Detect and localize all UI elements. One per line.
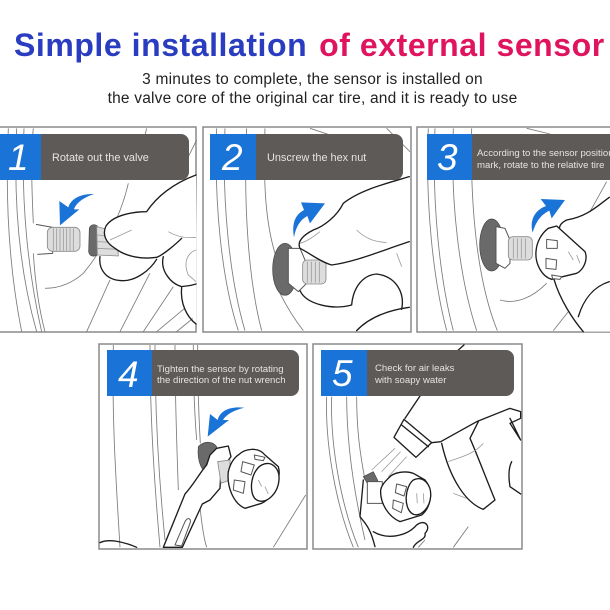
- panel 5: check for air leaks: [313, 344, 522, 549]
- banner 4: Tighten the sensor by rotating: [157, 364, 284, 375]
- illustration: hex nut and hand: [216, 128, 410, 331]
- panel 3: rotate to relative tire: [417, 127, 610, 332]
- panel 4: tighten the sensor: [99, 344, 307, 549]
- subtitle: [108, 71, 517, 107]
- panel 1: rotate out the valve: [0, 127, 197, 332]
- banner 4: 4: [118, 354, 139, 395]
- banner 5: with soapy water: [374, 375, 447, 386]
- banner 1: [0, 134, 189, 180]
- arrow 4: [208, 407, 244, 437]
- banner 3: mark, rotate to the relative tire: [477, 160, 604, 171]
- TPMS sensor: [536, 226, 586, 279]
- banner 1: Rotate out the valve: [52, 152, 149, 164]
- banner 4: [107, 350, 299, 396]
- hand: [553, 197, 610, 332]
- illustration: wrench and sensor: [100, 345, 306, 547]
- banner 3: According to the sensor position: [477, 148, 610, 159]
- valve stem: [36, 224, 80, 254]
- panel 2: unscrew the hex nut: [203, 127, 411, 332]
- valve cap: [89, 225, 118, 256]
- banner 5: 5: [332, 353, 353, 394]
- sensor: [218, 449, 279, 508]
- arrow 2: [293, 202, 325, 237]
- sensor nut: [273, 243, 326, 295]
- banner 4: the direction of the nut wrench: [157, 375, 286, 386]
- banner 1: 1: [8, 137, 29, 178]
- open wrench: [163, 446, 231, 547]
- nut: [198, 442, 217, 475]
- spray mist: [372, 448, 407, 477]
- banner 2: 2: [221, 137, 243, 178]
- nut: [363, 472, 378, 487]
- title: Simple installation of external sensor: [14, 27, 605, 63]
- hand: [100, 175, 197, 324]
- banner 5: Check for air leaks: [375, 363, 455, 374]
- sensor: [381, 472, 431, 522]
- leak foam: [360, 480, 428, 547]
- sensor nut: [480, 219, 532, 271]
- subtitle: the valve core of the original car tire, and it is ready to use: [108, 90, 517, 107]
- wheel edge: [100, 541, 137, 547]
- spray bottle and hand: [394, 396, 521, 510]
- illustration: tire, valve and hand: [7, 128, 197, 332]
- arrow 1: [59, 194, 94, 225]
- banner 2: [210, 134, 403, 180]
- subtitle: 3 minutes to complete, the sensor is installed on: [142, 71, 483, 88]
- banner 3: [427, 134, 610, 180]
- banner 2: Unscrew the hex nut: [267, 152, 366, 164]
- arrow 3: [532, 199, 565, 233]
- banner 3: 3: [437, 137, 458, 178]
- illustration: sensor and hand: [428, 128, 610, 332]
- banner 5: [321, 350, 514, 396]
- hand: [299, 177, 409, 331]
- illustration: spray bottle and sensor: [327, 345, 521, 547]
